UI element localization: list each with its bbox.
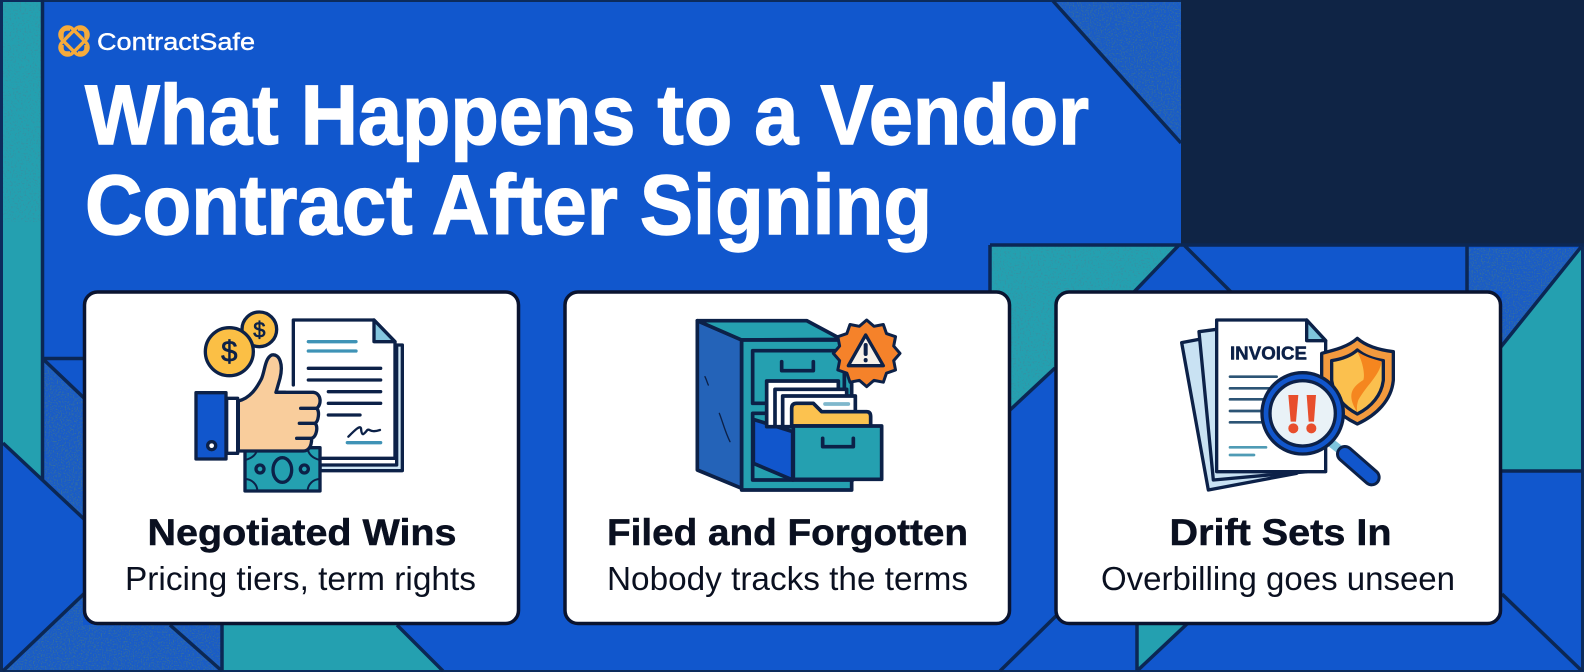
icon: filing cabinet with warning badge bbox=[697, 320, 900, 490]
icon: invoice with magnifier and shield bbox=[1182, 320, 1393, 490]
icon: invoice with magnifier and shield: INVOICE bbox=[1230, 342, 1307, 363]
panel: filed and forgotten bbox=[565, 292, 1010, 624]
title bbox=[85, 68, 1089, 252]
card heading: Negotiated Wins bbox=[148, 512, 457, 553]
card subtext: Pricing tiers, term rights bbox=[125, 560, 476, 597]
title: What Happens to a Vendor bbox=[85, 68, 1089, 162]
icon: thumbs up with contract and money: $ bbox=[221, 336, 237, 369]
icon: thumbs up with contract and money: $ bbox=[253, 318, 265, 343]
logo: ContractSafe bbox=[57, 24, 255, 58]
panel: drift sets in bbox=[1056, 292, 1500, 624]
panel: negotiated wins bbox=[84, 292, 518, 624]
title: Contract After Signing bbox=[85, 158, 932, 252]
card subtext: Nobody tracks the terms bbox=[607, 560, 968, 597]
icon: logo knot bbox=[57, 24, 91, 58]
card heading: Drift Sets In bbox=[1170, 512, 1392, 553]
card heading: Filed and Forgotten bbox=[607, 512, 968, 553]
logo wordmark: ContractSafe bbox=[97, 29, 255, 56]
icon: thumbs up with contract and money bbox=[196, 312, 402, 491]
card subtext: Overbilling goes unseen bbox=[1101, 560, 1455, 597]
